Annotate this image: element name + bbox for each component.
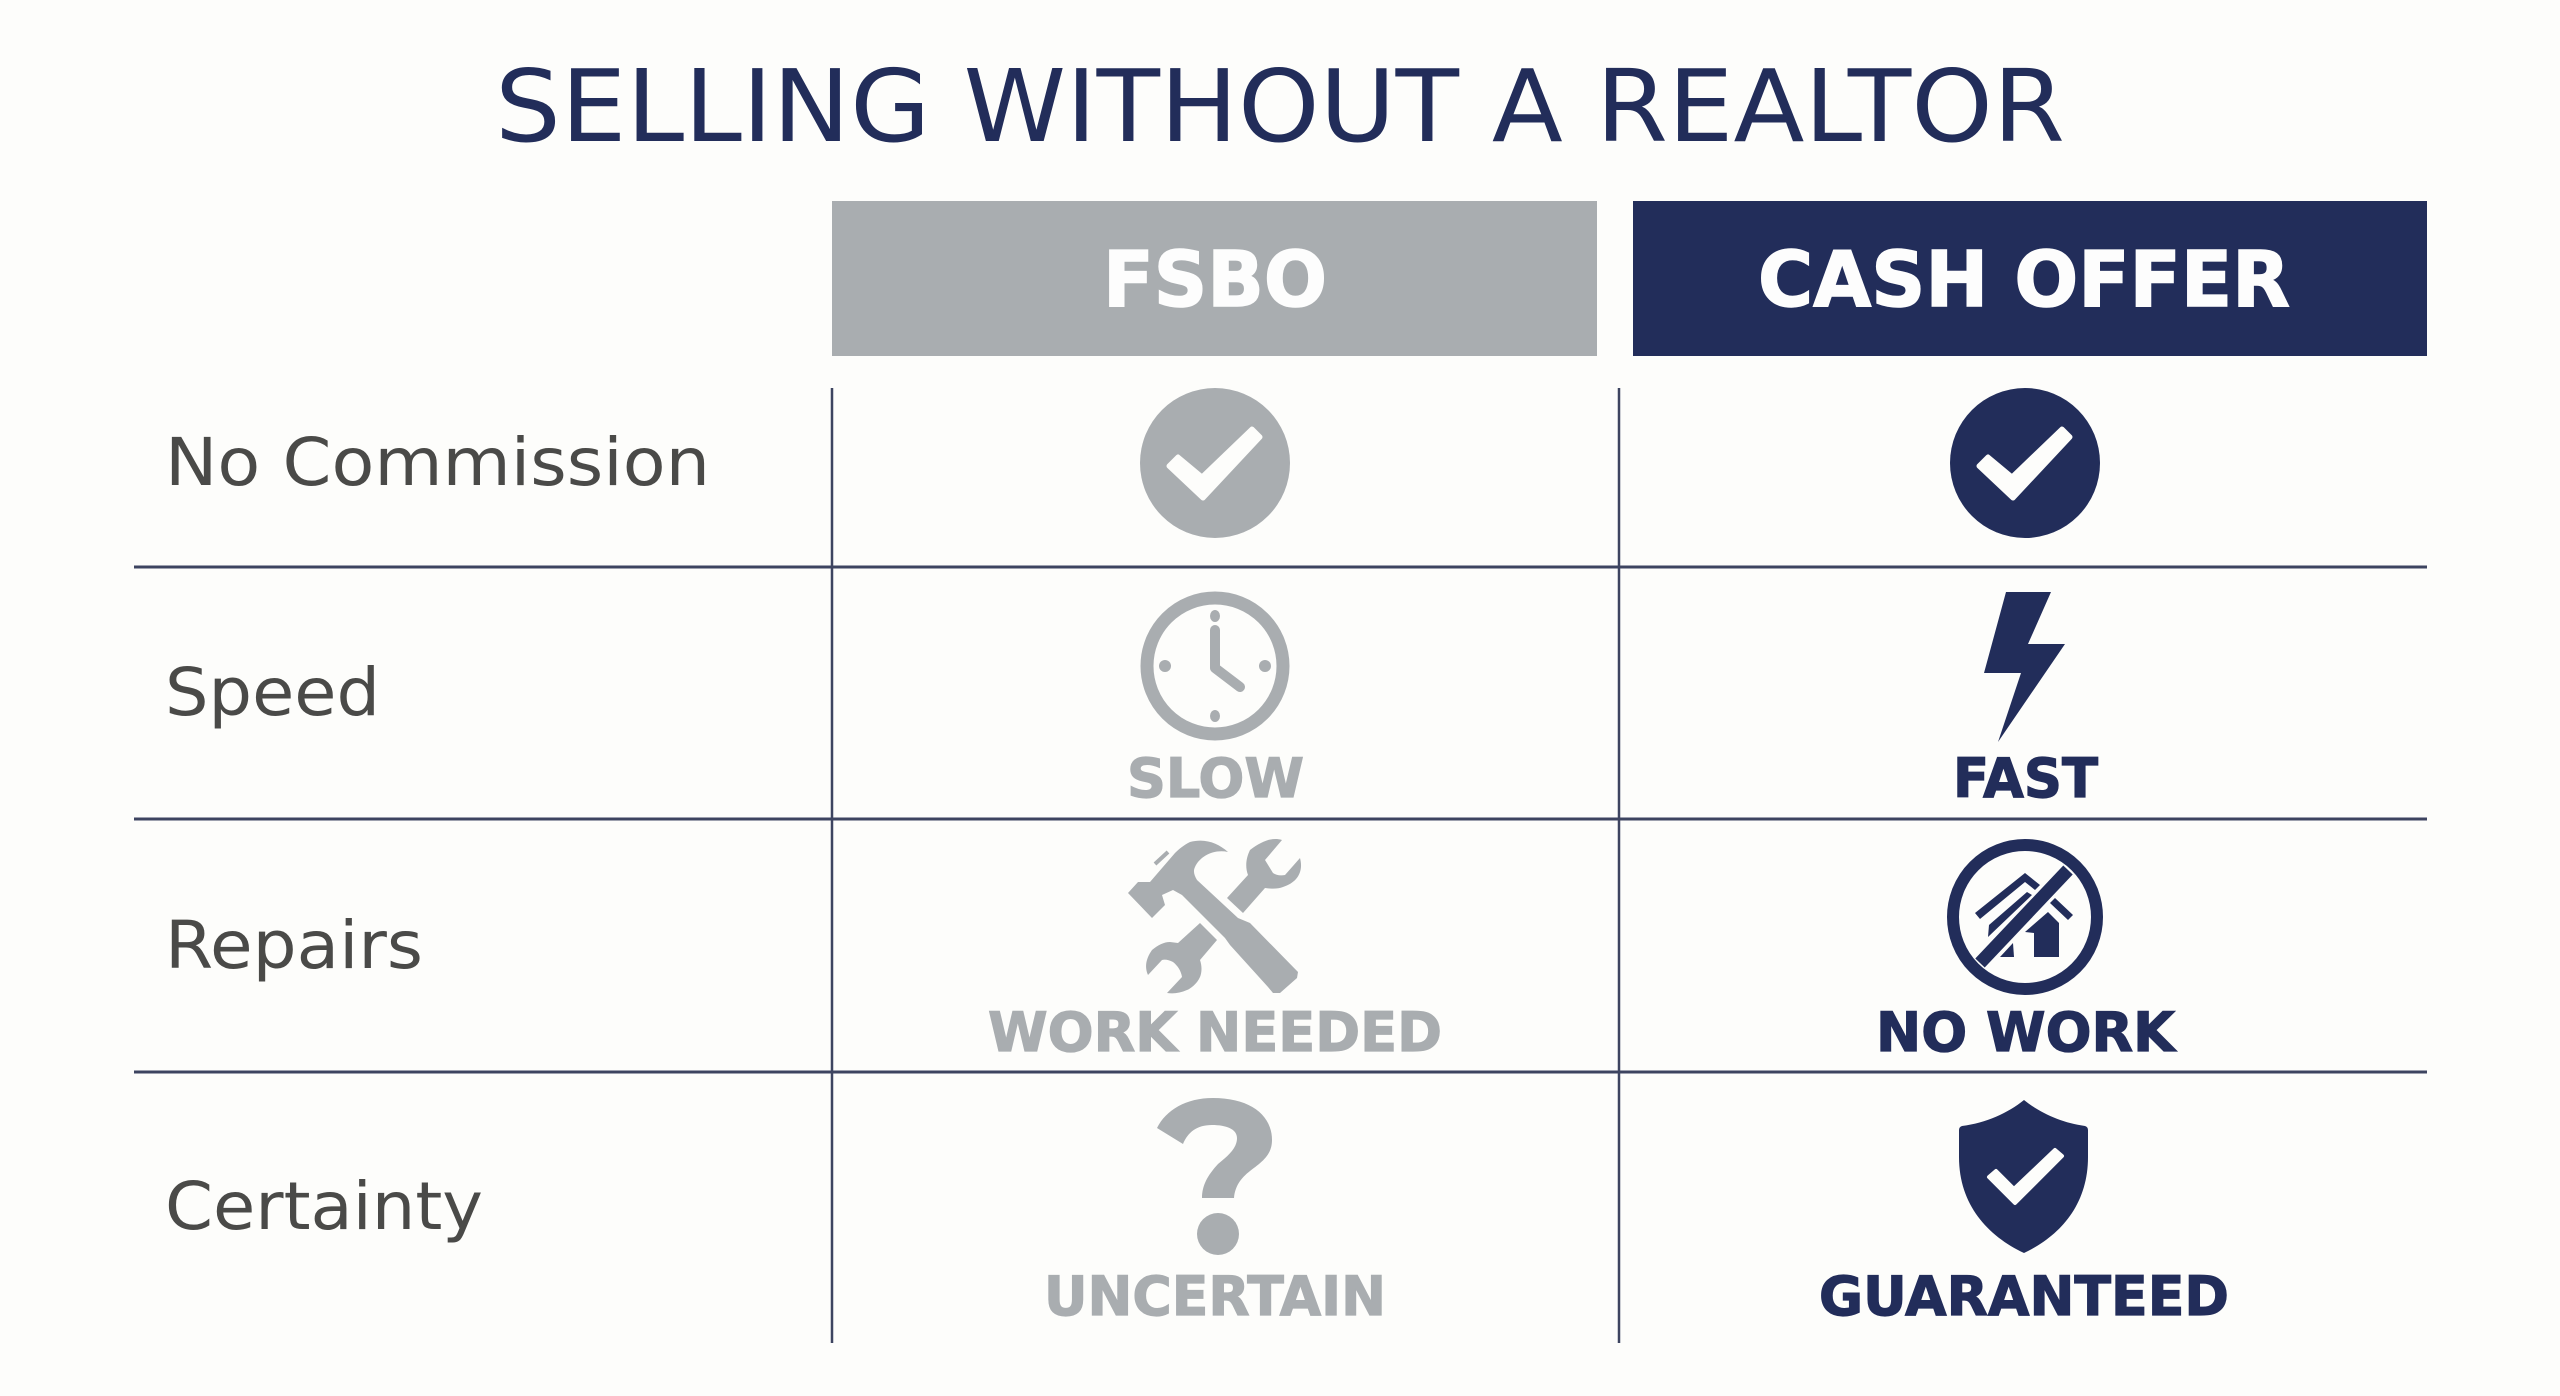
title: SELLING WITHOUT A REALTOR	[495, 48, 2065, 165]
wrench upper	[1227, 839, 1301, 913]
label: Guaranteed: GUARANTEED	[1819, 1265, 2229, 1328]
row label: Speed: Speed	[165, 654, 380, 731]
label: No Work: NO WORK	[1876, 1001, 2177, 1064]
icon: hammer and wrench	[1128, 839, 1301, 993]
column header: Cash Offer: CASH OFFER	[1758, 236, 2290, 325]
icon: question mark	[1157, 1098, 1272, 1255]
icon: no house work	[1953, 845, 2097, 989]
row label: Certainty: Certainty	[165, 1168, 483, 1245]
icon: lightning bolt	[1984, 592, 2065, 742]
label: Work Needed: WORK NEEDED	[988, 1001, 1442, 1064]
icon: clock	[1147, 598, 1283, 734]
icon: FSBO check circle	[1140, 388, 1290, 538]
column header: FSBO: FSBO	[1103, 236, 1327, 325]
wrench lower	[1146, 923, 1217, 993]
row label: No Commission: No Commission	[165, 424, 710, 501]
icon: Cash Offer check circle	[1950, 388, 2100, 538]
label: Uncertain: UNCERTAIN	[1044, 1265, 1386, 1328]
label: Slow: SLOW	[1127, 747, 1304, 810]
column header: Cash Offer	[1633, 201, 2427, 356]
icon: shield with check	[1959, 1100, 2088, 1253]
column header: FSBO	[832, 201, 1597, 356]
hammer	[1128, 841, 1298, 993]
label: Fast: FAST	[1953, 747, 2098, 810]
row label: Repairs: Repairs	[165, 907, 423, 984]
